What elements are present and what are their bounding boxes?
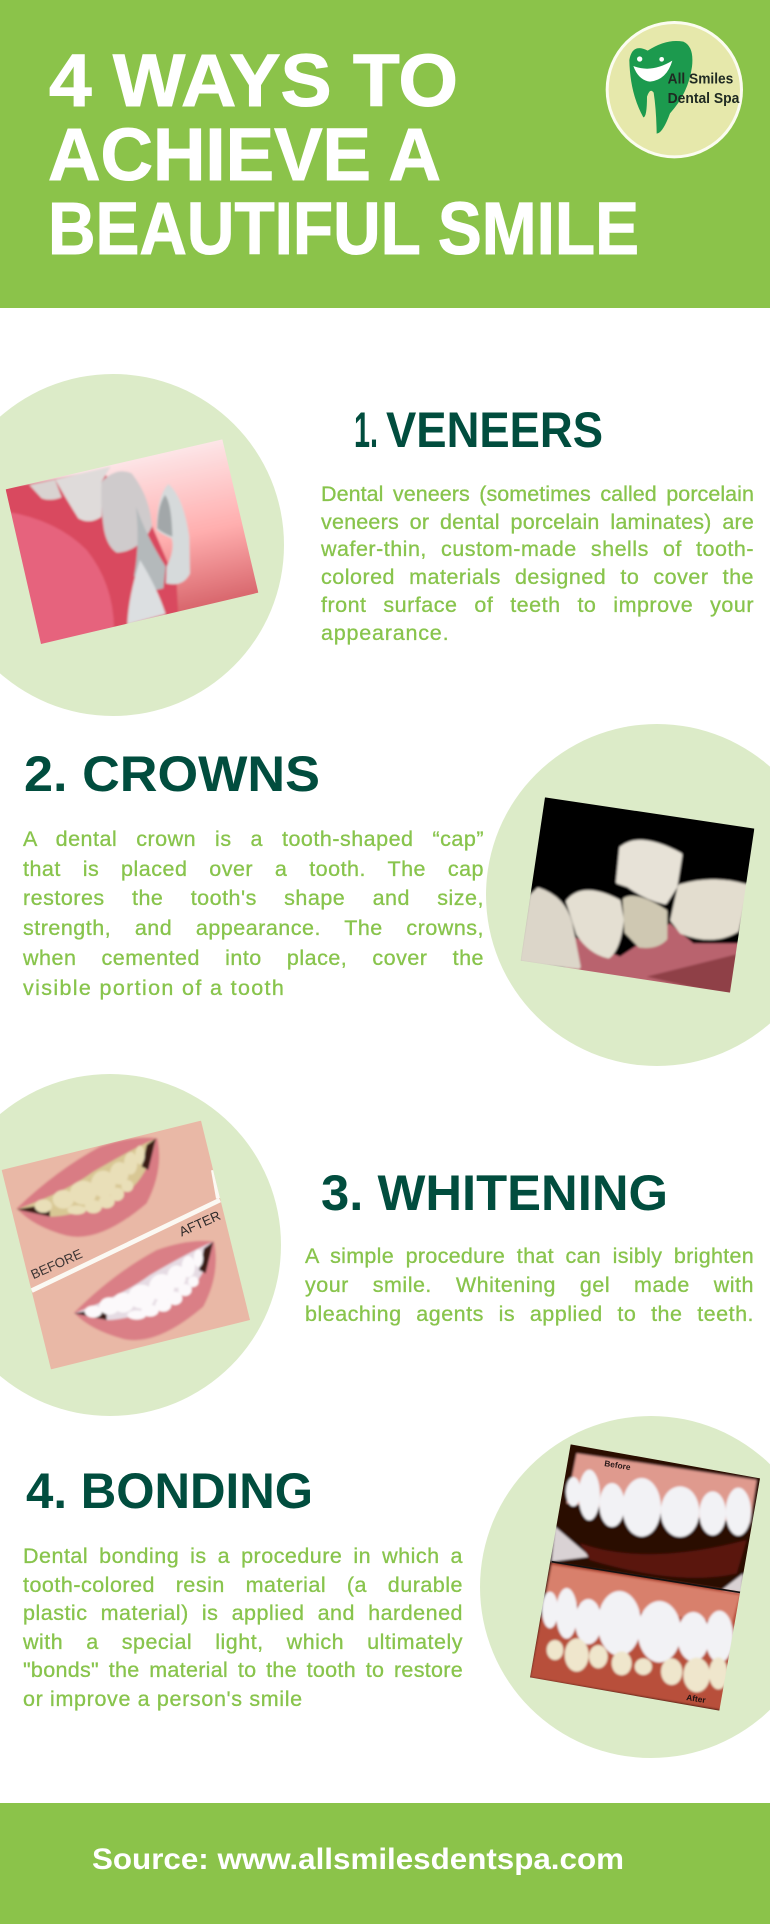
text: bonding description: "bonds" the material to the tooth to restore [23, 1658, 463, 1682]
text: bonding description: or improve a person's smile [23, 1686, 303, 1710]
heading: 1. Veneers: VENEERS [386, 402, 603, 458]
text: crowns description [22, 827, 484, 1000]
text: veneers description: veneers or dental porcelain laminates) are [321, 510, 754, 534]
text: whitening description [304, 1244, 754, 1326]
header banner [0, 0, 770, 308]
text: whitening description: A simple procedure that can isibly brighten [305, 1244, 754, 1268]
text: whitening description: your smile. Whitening gel made with [305, 1273, 754, 1297]
text: veneers description: front surface of teeth to improve your [321, 593, 754, 617]
text: bonding description: Dental bonding is a procedure in which a [23, 1544, 463, 1568]
text: crowns description: when cemented into place, cover the [23, 946, 484, 970]
footer banner [0, 1803, 770, 1924]
circle background [486, 724, 770, 1066]
title: ACHIEVE A [48, 113, 441, 196]
logo: All Smiles Dental Spa: All Smiles [668, 71, 733, 87]
image: before and after whitening: BEFORE [28, 1246, 85, 1282]
text: veneers description: appearance. [321, 621, 449, 645]
panel: crowns [486, 724, 770, 1066]
title [48, 39, 639, 270]
image: before and after whitening [0, 1117, 253, 1373]
image: before and after bonding: Before [604, 1458, 632, 1472]
text: bonding description: with a special light, which ultimately [23, 1630, 463, 1654]
text: veneers description: wafer-thin, custom-made shells of tooth- [321, 537, 754, 561]
image: dental crown illustration [520, 797, 754, 992]
title: BEAUTIFUL SMILE [48, 187, 639, 270]
logo: All Smiles Dental Spa [606, 21, 743, 158]
source text: Source: www.allsmilesdentspa.com [92, 1843, 624, 1876]
text: bonding description: plastic material) is applied and hardened [23, 1601, 463, 1625]
image: before and after bonding [527, 1440, 763, 1717]
text: veneers description: Dental veneers (sometimes called porcelain [321, 482, 754, 506]
panel: whitening [0, 1074, 281, 1416]
text: bonding description [22, 1544, 463, 1711]
title: 4 WAYS TO [49, 39, 458, 122]
text: bonding description: tooth-colored resin material (a durable [23, 1572, 463, 1596]
circle background [480, 1416, 770, 1758]
text: crowns description: A dental crown is a tooth-shaped “cap” [23, 827, 484, 851]
text: crowns description: visible portion of a tooth [23, 976, 285, 1000]
text: crowns description: restores the tooth's shape and size, [23, 886, 484, 910]
text: veneers description [320, 482, 754, 645]
heading: 1. Veneers: 1. [354, 402, 378, 458]
image: before and after whitening: AFTER [177, 1208, 223, 1239]
image: veneers illustration [6, 440, 258, 644]
logo: All Smiles Dental Spa: Dental Spa [668, 91, 740, 107]
text: crowns description: strength, and appearance. The crowns, [23, 916, 484, 940]
panel: veneers [0, 374, 754, 716]
text: veneers description: colored materials designed to cover the [321, 565, 754, 589]
image: before and after bonding: After [686, 1692, 707, 1705]
panel: bonding [480, 1416, 770, 1758]
circle background [0, 1074, 281, 1416]
circle background [0, 374, 284, 716]
text: crowns description: that is placed over a tooth. The cap [23, 857, 484, 881]
text: whitening description: bleaching agents is applied to the teeth. [305, 1302, 754, 1326]
